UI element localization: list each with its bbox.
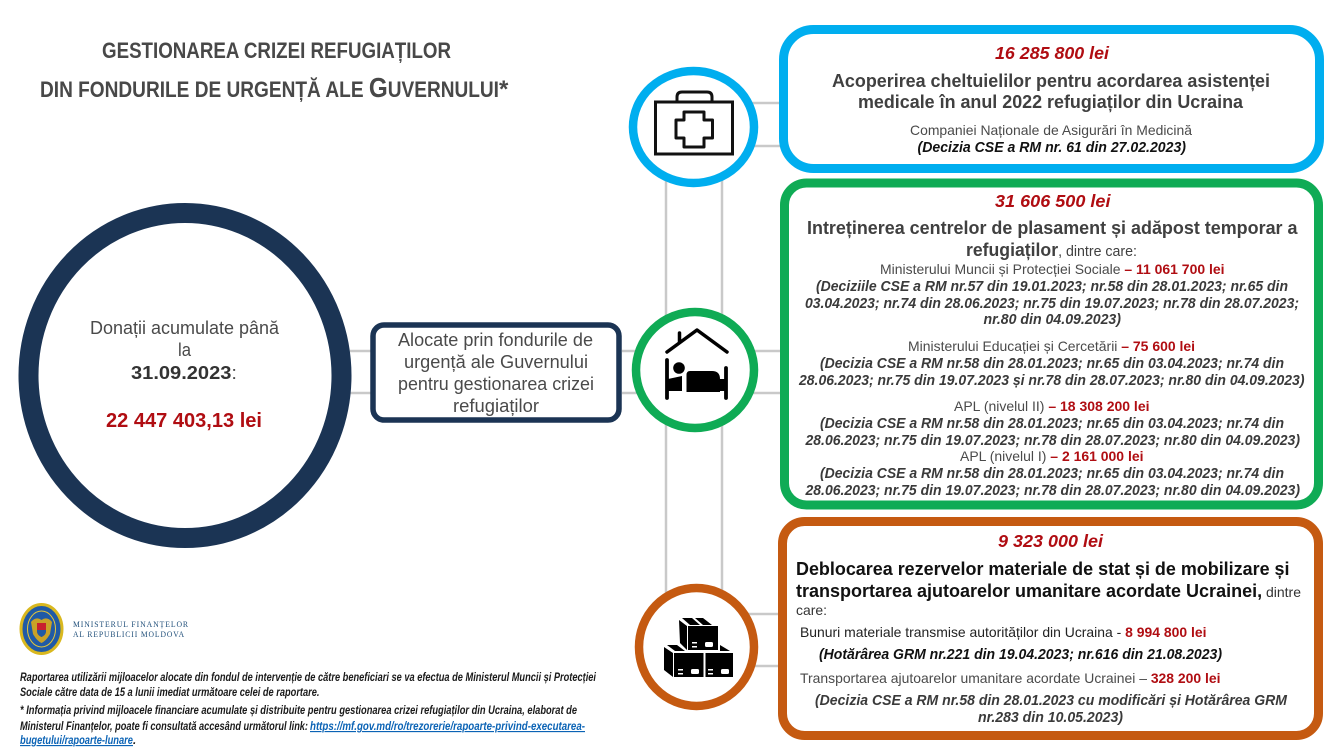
panel: donations circle: la	[178, 340, 192, 360]
panel: shelter centres: Intreținerea centrelor de plasament și adăpost temporar a	[807, 218, 1298, 238]
panel: shelter centres: (Decizia CSE a RM nr.58 din 28.01.2023; nr.65 din 03.04.2023; nr.74 din	[820, 466, 1284, 482]
logo: Ministry of Finance: AL REPUBLICII MOLDOVA	[73, 629, 185, 639]
panel: shelter centres: 28.06.2023; nr.75 din 19.07.2023; nr.78 din 28.07.2023; nr.80 din 04.09.2023)	[805, 483, 1300, 499]
panel: allocated funds box: urgență ale Guvernului	[404, 352, 588, 372]
panel: allocated funds box	[373, 325, 619, 420]
panel: shelter centres: APL (nivelul I) – 2 161 000 lei	[960, 448, 1144, 464]
panel: material reserves: Deblocarea rezervelor materiale de stat și de mobilizare și	[796, 559, 1290, 579]
panel: donations circle: 31.09.2023 :	[131, 363, 237, 383]
panel: shelter centres	[784, 183, 1318, 505]
footnotes: bugetului/rapoarte-lunare	[20, 735, 133, 747]
panel: material reserves: Bunuri materiale transmise autorităților din Ucraina - 8 994 800 lei	[800, 624, 1206, 640]
panel: medical assistance: medicale în anul 2022 refugiaților din Ucraina	[858, 92, 1244, 112]
panel: shelter centres: Ministerului Educației și Cercetării – 75 600 lei	[908, 338, 1195, 354]
footnotes: .	[133, 735, 136, 747]
panel: material reserves: (Hotărârea GRM nr.221 din 19.04.2023; nr.616 din 21.08.2023)	[819, 647, 1222, 663]
panel: shelter centres: (Decizia CSE a RM nr.58 din 28.01.2023; nr.65 din 03.04.2023; nr.74 din	[820, 416, 1284, 432]
panel: shelter centres: (Deciziile CSE a RM nr.57 din 19.01.2023; nr.58 din 28.01.2023; nr.65 din	[816, 279, 1288, 295]
panel: donations circle: 22 447 403,13 lei	[106, 410, 262, 432]
panel: medical assistance	[784, 30, 1320, 168]
title	[40, 38, 509, 103]
panel: shelter centres: 03.04.2023; nr.74 din 28.06.2023; nr.75 din 19.07.2023; nr.78 din 28.07.2023;	[805, 296, 1299, 312]
panel: allocated funds box: pentru gestionarea crizei	[398, 374, 594, 394]
panel: allocated funds box: Alocate prin fondurile de	[398, 330, 593, 350]
icon: medical kit in blue circle	[633, 71, 754, 183]
footnotes: Sociale către data de 15 a lunii imediat următoare celei de raportare.	[20, 687, 320, 699]
footnotes: Ministerul Finanțelor, poate fi consultată accesând următorul link:	[20, 721, 308, 733]
footnotes	[20, 672, 597, 747]
panel: donations circle: Donații acumulate până	[90, 318, 280, 338]
panel: shelter centres: 28.06.2023; nr.75 din 19.07.2023 și nr.78 din 28.07.2023; nr.80 din 04.09.2023)	[798, 373, 1305, 389]
title: *	[499, 76, 509, 103]
panel: shelter centres: APL (nivelul II) – 18 308 200 lei	[954, 398, 1150, 414]
panel: shelter centres: 31 606 500 lei	[995, 191, 1112, 211]
panel: material reserves: (Decizia CSE a RM nr.58 din 28.01.2023 cu modificări și Hotărârea GRM	[815, 693, 1288, 709]
panel: material reserves: 9 323 000 lei	[998, 531, 1104, 551]
footnotes: Raportarea utilizării mijloacelor alocate din fondul de intervenție de către beneficiari se va efectua de Ministerul Muncii și Protecției	[20, 672, 597, 684]
panel: medical assistance: 16 285 800 lei	[995, 43, 1110, 63]
connector lines	[350, 103, 782, 666]
panel: shelter centres: Ministerului Muncii și Protecției Sociale – 11 061 700 lei	[880, 261, 1224, 277]
panel: material reserves: Transportarea ajutoarelor umanitare acordate Ucrainei – 328 200 lei	[800, 670, 1220, 686]
footnotes: * Informația privind mijloacele financiare acumulate și distribuite pentru gestionarea crizei refugiaților din Ucraina, elaborat de	[20, 705, 577, 717]
panel: medical assistance: Companiei Naționale de Asigurări în Medicină	[910, 122, 1192, 138]
icon: stacked boxes in orange circle	[639, 588, 754, 706]
panel: shelter centres: (Decizia CSE a RM nr.58 din 28.01.2023; nr.65 din 03.04.2023; nr.74 din	[820, 356, 1284, 372]
logo: Ministry of Finance: MINISTERUL FINANȚELOR	[73, 619, 189, 630]
panel: material reserves: care:	[796, 602, 827, 618]
panel: shelter centres: 28.06.2023; nr.75 din 19.07.2023; nr.78 din 28.07.2023; nr.80 din 04.09.2023)	[805, 433, 1300, 449]
icon: person in bed under roof in green circle	[636, 312, 754, 428]
title: DIN FONDURILE DE URGENȚĂ ALE GUVERNULUI	[40, 72, 499, 103]
panel: material reserves: nr.283 din 10.05.2023)	[978, 710, 1123, 726]
panel: material reserves	[782, 522, 1318, 736]
panel: donations circle	[28, 213, 342, 538]
panel: material reserves: transportarea ajutoarelor umanitare acordate Ucrainei, dintre	[796, 581, 1301, 601]
panel: medical assistance: (Decizia CSE a RM nr. 61 din 27.02.2023)	[918, 140, 1186, 156]
panel: allocated funds box: refugiaților	[453, 396, 539, 416]
panel: medical assistance: Acoperirea cheltuielilor pentru acordarea asistenței	[832, 71, 1270, 91]
footnotes: https://mf.gov.md/ro/trezorerie/rapoarte-privind-executarea-	[310, 721, 585, 733]
panel: shelter centres: nr.80 din 04.09.2023)	[984, 312, 1121, 328]
panel: shelter centres: refugiaților, dintre care:	[966, 240, 1137, 260]
logo: Ministry of Finance	[21, 604, 189, 654]
title: GESTIONAREA CRIZEI REFUGIAȚILOR	[102, 38, 451, 63]
